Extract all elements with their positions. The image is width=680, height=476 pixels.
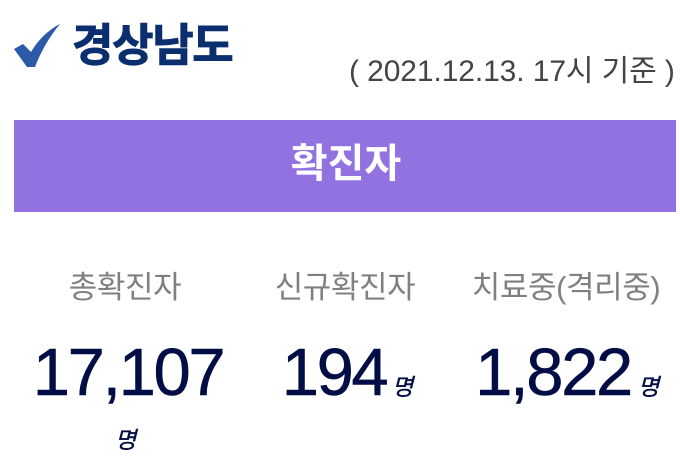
label: in treatment: 치료중(격리중) (472, 270, 660, 305)
label: total confirmed: 총확진자 (69, 270, 181, 305)
value: in treatment: 1,822 (475, 335, 631, 410)
unit: new: 명 (392, 374, 413, 400)
unit: total: 명 (115, 427, 136, 453)
banner: 확진자 (14, 120, 676, 212)
timestamp: ( 2021.12.13. 17시 기준 ) (349, 55, 675, 88)
title: 경상남도 (72, 20, 232, 71)
banner: 확진자: 확진자 (291, 142, 401, 186)
unit: treatment: 명 (638, 374, 659, 400)
label: new confirmed: 신규확진자 (275, 270, 415, 305)
icon: check mark (14, 24, 60, 67)
value: new confirmed: 194 (282, 335, 386, 410)
value: total confirmed: 17,107 (33, 335, 223, 410)
